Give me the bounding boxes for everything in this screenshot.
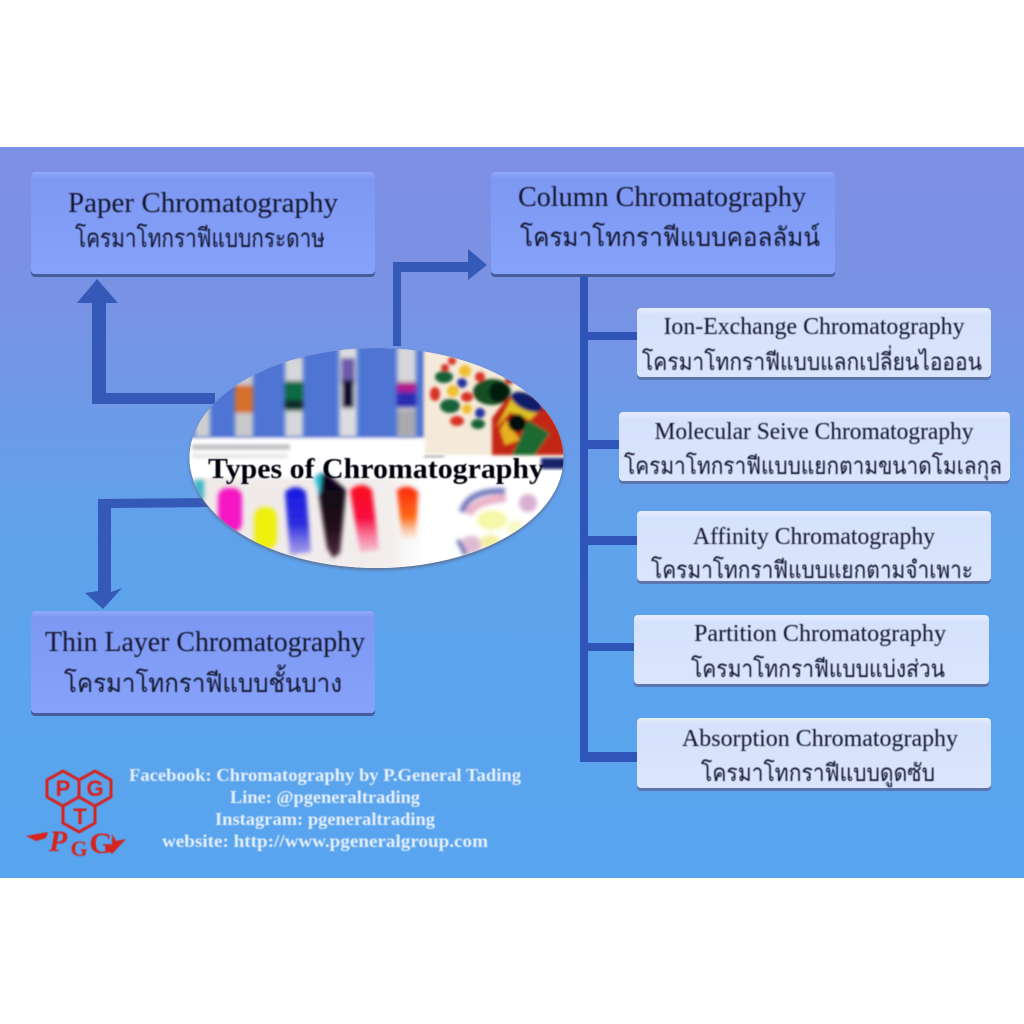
panel: thin layer chromatography bbox=[31, 611, 375, 716]
panel: partition chromatography bbox=[634, 615, 989, 687]
panel: paper chromatography: โครมาโทกราฟีแบบกระดาษ bbox=[75, 223, 325, 253]
oval title: Types of Chromatography bbox=[208, 454, 544, 485]
panel: ion-exchange chromatography: โครมาโทกราฟีแบบแลกเปลี่ยนไอออน bbox=[642, 345, 982, 376]
panel: affinity chromatography bbox=[637, 511, 991, 584]
backgrounds of the collage bbox=[185, 340, 569, 578]
central oval photo collage bbox=[185, 340, 570, 578]
logo: PGT: P bbox=[56, 776, 70, 801]
panel: paper chromatography bbox=[31, 172, 375, 277]
panel: molecular seive chromatography bbox=[619, 412, 1010, 484]
panel: absorption chromatography: โครมาโทกราฟีแบบดูดซับ bbox=[701, 759, 935, 788]
logo wordmark: G bbox=[89, 827, 113, 860]
logo: PGT bbox=[26, 771, 126, 861]
panel: column chromatography: Column Chromatography bbox=[518, 182, 806, 213]
connector: column chromatography tree bbox=[580, 276, 637, 762]
arrow: to paper chromatography bbox=[77, 279, 215, 404]
panel: ion-exchange chromatography: Ion-Exchange Chromatography bbox=[664, 314, 964, 340]
arrow: to thin layer chromatography bbox=[85, 498, 215, 609]
panel: partition chromatography: โครมาโทกราฟีแบบแบ่งส่วน bbox=[691, 655, 945, 683]
panel: paper chromatography: Paper Chromatography bbox=[68, 188, 338, 219]
logo wordmark: P bbox=[48, 825, 68, 858]
colored chromatography streaks bbox=[194, 472, 537, 558]
arrow: to column chromatography bbox=[393, 249, 487, 346]
panel: column chromatography: โครมาโทกราฟีแบบคอลลัมน์ bbox=[520, 222, 820, 252]
panel: ion-exchange chromatography bbox=[637, 308, 991, 380]
panel: thin layer chromatography: Thin Layer Chromatography bbox=[45, 627, 365, 658]
logo wordmark: G bbox=[70, 836, 88, 861]
TLC plate spots bbox=[430, 357, 570, 455]
footer: contact details: Instagram: pgeneraltrading bbox=[215, 809, 435, 829]
logo wordmark bbox=[26, 825, 126, 861]
panel: affinity chromatography: Affinity Chromatography bbox=[693, 524, 935, 550]
footer: contact details: Facebook: Chromatography by P.General Tading bbox=[129, 765, 521, 785]
panel: thin layer chromatography: โครมาโทกราฟีแบบชั้นบาง bbox=[64, 664, 342, 698]
footer: contact details bbox=[129, 765, 521, 851]
panel: molecular seive chromatography: Molecular Seive Chromatography bbox=[654, 419, 974, 445]
logo: PGT: G bbox=[86, 776, 104, 801]
panel: affinity chromatography: โครมาโทกราฟีแบบแยกตามจำเพาะ bbox=[651, 556, 973, 584]
footer: contact details: Line: @pgeneraltrading bbox=[230, 787, 420, 807]
test tubes bbox=[195, 347, 416, 437]
footer: contact details: website: http://www.pgeneralgroup.com bbox=[162, 831, 488, 851]
corner accents bbox=[541, 458, 567, 469]
panel: partition chromatography: Partition Chromatography bbox=[694, 621, 946, 647]
panel: absorption chromatography: Absorption Chromatography bbox=[682, 726, 958, 752]
panel: blue background bbox=[0, 147, 1024, 878]
panel: column chromatography bbox=[491, 172, 835, 277]
logo: PGT: T bbox=[73, 804, 87, 829]
panel: absorption chromatography bbox=[637, 718, 991, 791]
